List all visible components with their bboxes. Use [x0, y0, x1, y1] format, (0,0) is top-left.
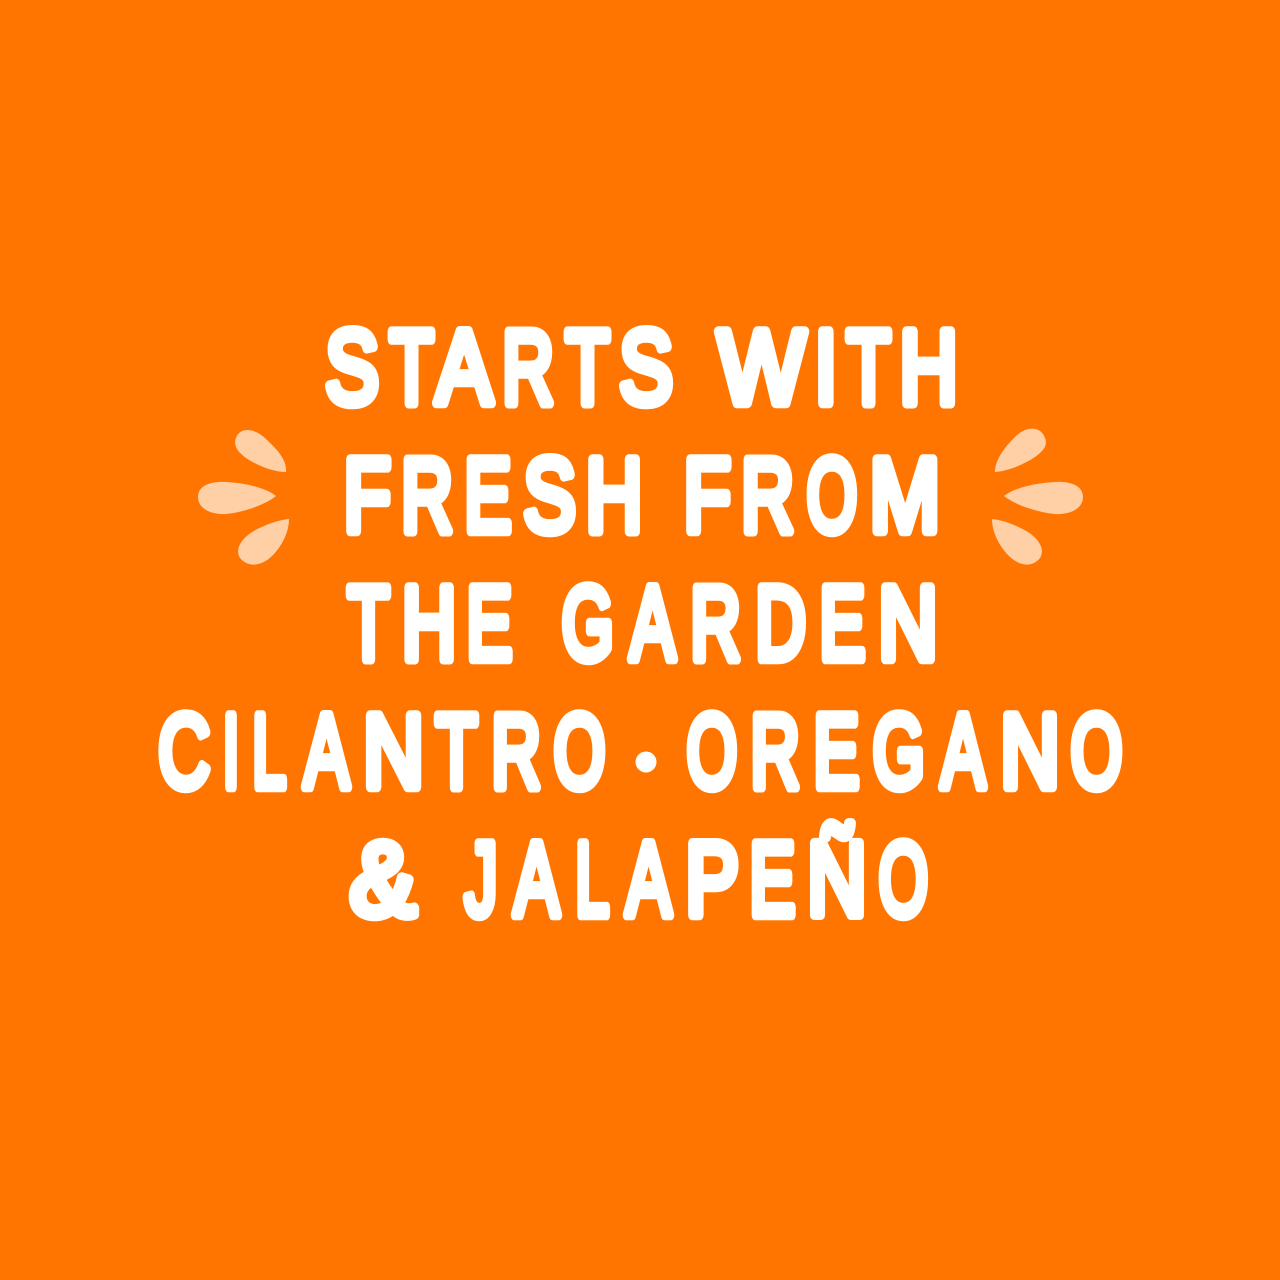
text line 4: E — [814, 694, 859, 810]
text line 2: F — [344, 438, 391, 554]
text line 3: A — [630, 566, 675, 682]
text line 2: E — [464, 438, 511, 554]
text line 1: S — [325, 310, 379, 426]
text line 1: A — [436, 310, 493, 426]
text line 1: T — [847, 310, 890, 426]
text line 3: H — [402, 566, 456, 682]
icon: right burst — [992, 429, 1083, 565]
text line 4: A — [941, 694, 985, 810]
text line 4: N — [1000, 694, 1060, 810]
text line 4: T — [436, 694, 477, 810]
text line 4: O — [554, 694, 605, 810]
text line 2: R — [741, 438, 794, 554]
text line 3: T — [348, 566, 389, 682]
text line 5: O — [879, 822, 928, 938]
text line 2: S — [524, 438, 576, 554]
text line 4: C — [158, 694, 210, 810]
text line 4: O — [687, 694, 737, 810]
text line 3: E — [820, 566, 865, 682]
text line 1: T — [390, 310, 434, 426]
text line 3: E — [466, 566, 512, 682]
text line 1: W — [718, 310, 805, 426]
icon: left burst — [198, 430, 289, 565]
text line 5: Ñ — [807, 822, 867, 938]
text line 5: J — [465, 822, 497, 938]
text line 1: H — [900, 310, 958, 426]
text line 1: T — [566, 310, 610, 426]
text line 2: F — [684, 438, 731, 554]
text line 2: M — [870, 438, 940, 554]
text line 5: P — [686, 822, 739, 938]
text line 5: & — [350, 822, 416, 938]
text line 4: L — [252, 694, 286, 810]
text line 2: O — [807, 438, 857, 554]
text line 4: R — [750, 694, 800, 810]
text line 1: I — [815, 310, 837, 426]
text line 2: R — [401, 438, 453, 554]
text line 3: N — [878, 566, 938, 682]
text line 4: G — [873, 694, 925, 810]
text line 5: E — [750, 822, 795, 938]
text line 3: R — [690, 566, 741, 682]
text line 4: A — [304, 694, 349, 810]
text line 1: S — [619, 310, 673, 426]
text line 3: D — [755, 566, 806, 682]
text line 5: A — [514, 822, 559, 938]
text line 4: N — [363, 694, 424, 810]
text line 5: L — [575, 822, 609, 938]
text line 4: I — [223, 694, 239, 810]
text line 1: R — [502, 310, 554, 426]
text line 2: H — [586, 438, 642, 554]
text line 4 — [158, 694, 1122, 810]
heading: starts with fresh from the garden, cilantro, oregano and jalapeno — [158, 310, 1122, 938]
text line 4: O — [1071, 694, 1122, 810]
text line 5: A — [626, 822, 671, 938]
text line 4: R — [492, 694, 541, 810]
text line 3: G — [562, 566, 614, 682]
